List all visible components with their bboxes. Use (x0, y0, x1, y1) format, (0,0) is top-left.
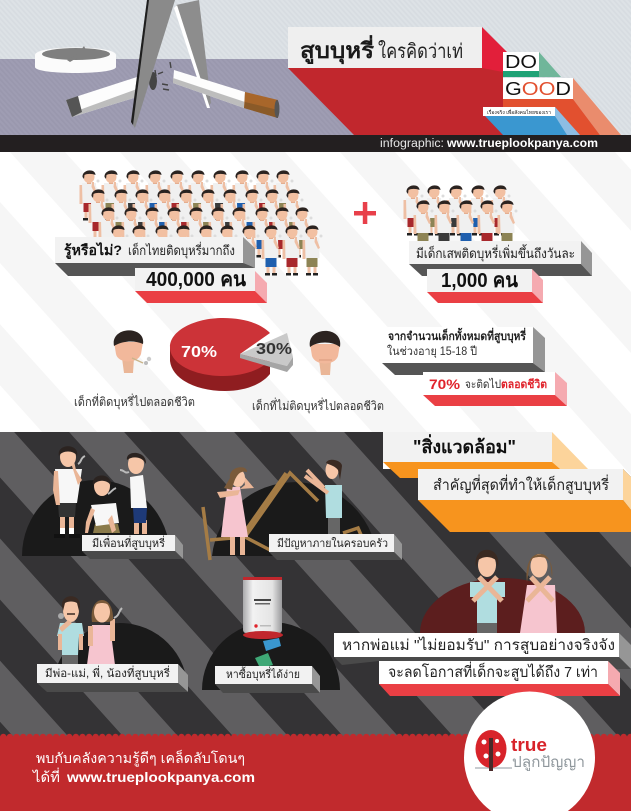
title box: สูบบุหรี่ (300, 34, 374, 65)
panel: family members smoke (37, 596, 188, 692)
logo: Do Good: เรื่องจริง เพื่อสังคมไทยของเรา (487, 109, 551, 116)
footer band: พบกับคลังความรู้ดีๆ เคล็ดลับโดนๆ (36, 749, 245, 767)
panel: orange heading (383, 432, 631, 532)
footer band: ได้ที่ (32, 768, 60, 785)
icon: non-smoker head (310, 331, 340, 375)
footer band (0, 732, 631, 811)
pie chart: 70 / 30: 30% (256, 341, 292, 358)
figure: woman (217, 467, 254, 555)
icon: ashtray (35, 46, 116, 73)
callout: did you know (55, 237, 255, 276)
label box: มีปัญหาภายในครอบครัว (277, 537, 388, 550)
callout: 400,000: 400,000 คน (146, 269, 246, 291)
label box: มีพ่อ-แม่, พี่, น้องที่สูบบุหรี่ (45, 665, 170, 680)
header panel (0, 0, 631, 135)
ribbon: red perspective shape (288, 27, 507, 135)
title box (288, 27, 482, 68)
panel: parents reject smoking (334, 550, 631, 696)
callout: did you know: เด็กไทยติดบุหรี่มากถึง (128, 241, 235, 259)
label box (82, 535, 183, 559)
icon: broken chair (203, 473, 361, 560)
panel: orange heading: สำคัญที่สุดที่ทำให้เด็กสูบบุหรี่ (433, 474, 609, 495)
black credit bar (0, 135, 631, 152)
callout: 70% for life: จะติดไป (465, 378, 501, 391)
icon: broken cigarette right with filter (155, 62, 280, 118)
figure: sitting student smoking (85, 476, 120, 533)
label: not addicted for life: เด็กที่ไม่ติดบุหรี่ไปตลอดชีวิต (252, 397, 384, 414)
title box: ใครคิดว่าเท่ (378, 40, 463, 63)
figure: father smoking (57, 596, 84, 665)
label: addicted for life: เด็กที่ติดบุหรี่ไปตลอดชีวิต (74, 393, 195, 410)
figure: man shouting (305, 460, 342, 534)
panel: friends who smoke (22, 446, 183, 559)
label box: หาซื้อบุหรี่ได้ง่าย (226, 666, 300, 681)
label box (269, 534, 402, 560)
icon: broken cigarette left (66, 72, 157, 117)
callout: increase per day: มีเด็กเสพติดบุหรี่เพิ่มขึ้นถึงวันละ (416, 244, 575, 262)
label box: มีเพื่อนที่สูบบุหรี่ (92, 535, 165, 550)
panel: family problems (203, 460, 402, 560)
callout: age 15-18: จากจำนวนเด็กทั้งหมดที่สูบบุหรี่ (388, 327, 527, 344)
callout: 1,000 (427, 269, 543, 303)
pie chart: 70 / 30: 70% (181, 344, 217, 361)
student crowd: 1,000 (404, 185, 518, 250)
background: white striped section (0, 152, 631, 482)
label box (37, 664, 188, 692)
callout: 400,000 (135, 268, 267, 303)
callout: 70% for life: ตลอดชีวิต (501, 378, 547, 391)
panel: orange heading: "สิ่งแวดล้อม" (413, 434, 516, 457)
logo: true ปลูกปัญญา: true (511, 735, 547, 755)
pie chart: 70 / 30 (170, 318, 293, 391)
logo: true ปลูกปัญญา (464, 692, 595, 811)
callout: 7 times (379, 661, 620, 696)
black credit bar: infographic: (380, 138, 444, 150)
callout: parents do not accept (334, 633, 631, 669)
callout: did you know: รู้หรือไม่? (64, 241, 122, 259)
dark striped section background (0, 432, 631, 742)
icon: plus (354, 202, 376, 224)
callout: 1,000: 1,000 คน (441, 270, 518, 292)
figure: mother crossing arms (520, 554, 557, 633)
icon: smoker head (114, 330, 151, 373)
panel: easy to buy (202, 577, 340, 693)
callout: 70% for life: 70% (429, 376, 461, 392)
black credit bar: www.trueplookpanya.com (446, 138, 598, 150)
figure: standing student smoking (53, 446, 85, 538)
callout: age 15-18 (382, 327, 545, 375)
callout: parents do not accept: หากพ่อแม่ "ไม่ยอมรับ" การสูบอย่างจริงจัง (342, 636, 615, 654)
figure: father crossing arms (470, 550, 505, 633)
callout: 70% for life (423, 372, 567, 406)
logo: Do Good: GOO D (505, 79, 571, 99)
student crowd: 400,000 (80, 170, 322, 276)
icon: tree (475, 730, 512, 771)
figure: mother smoking (87, 600, 122, 665)
icon: scissor blades (131, 0, 211, 128)
footer band: www.trueplookpanya.com (66, 769, 255, 785)
icon: vending machine (243, 577, 283, 668)
callout: age 15-18: ในช่วงอายุ 15-18 ปี (387, 345, 477, 358)
callout: increase per day (409, 241, 592, 276)
logo: true ปลูกปัญญา: ปลูกปัญญา (512, 754, 585, 771)
figure: side student smoking (120, 453, 147, 534)
logo: Do Good: DO (505, 52, 537, 72)
logo: Do Good (483, 52, 621, 135)
callout: 7 times: จะลดโอกาสที่เด็กจะสูบได้ถึง 7 เท่า (388, 661, 598, 681)
